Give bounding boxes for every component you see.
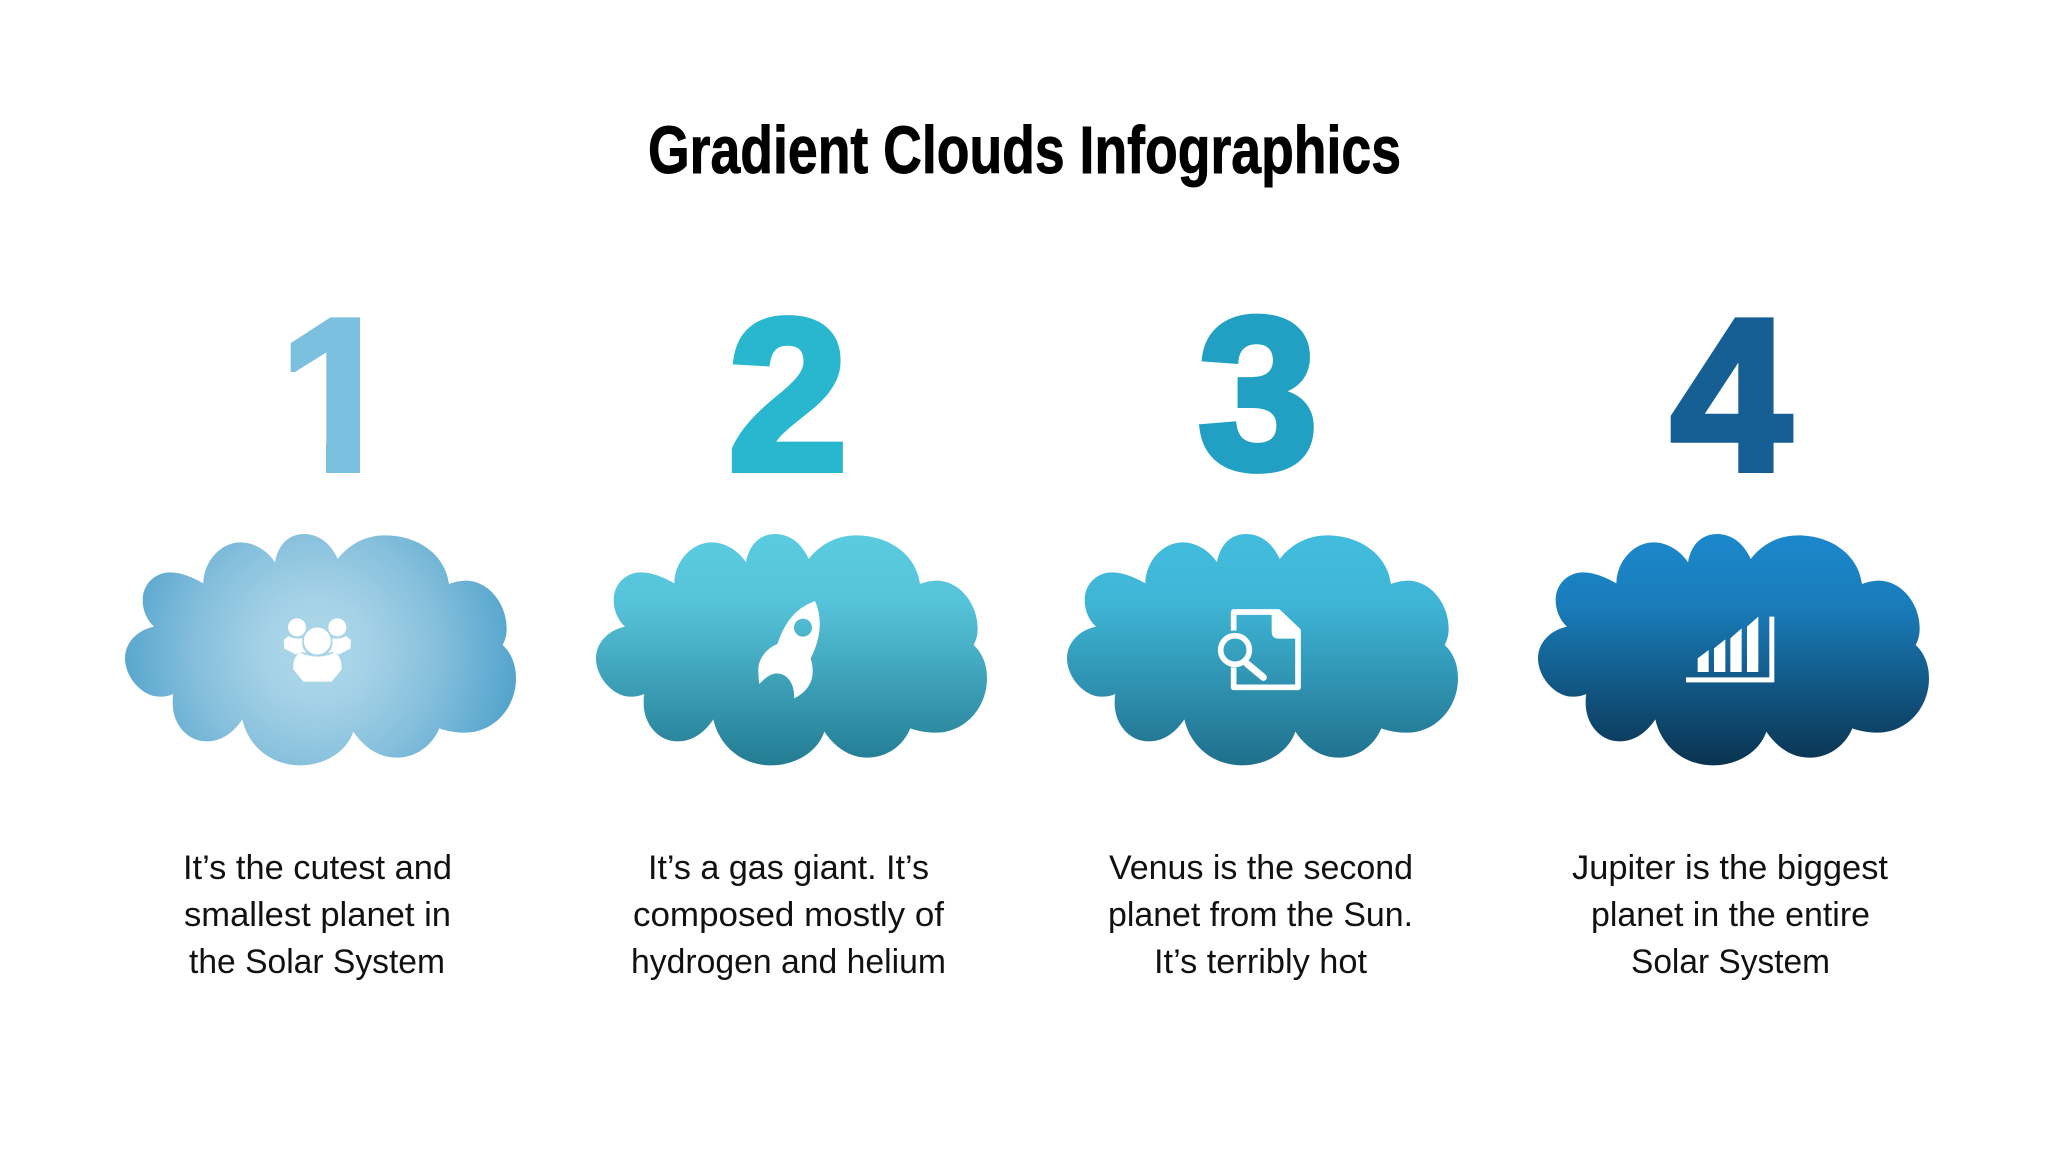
number 2: 2 <box>728 274 848 516</box>
description 4: planet in the entire <box>1591 896 1870 934</box>
description 3: It’s terribly hot <box>1154 943 1368 981</box>
panel: column 2 <box>596 274 987 981</box>
description 1 <box>183 849 452 981</box>
icon: people <box>284 618 351 682</box>
icon: document search <box>1221 611 1301 687</box>
description 1: It’s the cutest and <box>183 849 452 887</box>
description 3: Venus is the second <box>1109 849 1413 887</box>
title: Gradient Clouds Infographics <box>648 113 1401 188</box>
cloud 2 <box>596 534 987 765</box>
cloud 3 <box>1067 534 1458 765</box>
icon: rocket <box>758 601 820 698</box>
description 2: hydrogen and helium <box>631 943 946 981</box>
description 3 <box>1108 849 1413 981</box>
description 2: composed mostly of <box>633 896 945 934</box>
description 3: planet from the Sun. <box>1108 896 1413 934</box>
description 1: smallest planet in <box>184 896 451 934</box>
description 1: the Solar System <box>189 943 445 981</box>
panel: column 3 <box>1067 272 1458 981</box>
number 3: 3 <box>1198 272 1318 514</box>
description 4: Jupiter is the biggest <box>1572 849 1889 887</box>
panel: column 4 <box>1538 274 1929 981</box>
infographic canvas <box>125 124 1929 980</box>
icon: bar chart <box>1686 617 1774 682</box>
description 2 <box>631 849 946 981</box>
cloud 1 <box>125 534 516 765</box>
description 4 <box>1572 849 1889 981</box>
number 1: 1 <box>279 274 400 516</box>
number 4: 4 <box>1671 274 1791 516</box>
panel: column 1 <box>125 274 516 981</box>
description 4: Solar System <box>1631 943 1830 981</box>
description 2: It’s a gas giant. It’s <box>648 849 929 887</box>
cloud 4 <box>1538 534 1929 765</box>
